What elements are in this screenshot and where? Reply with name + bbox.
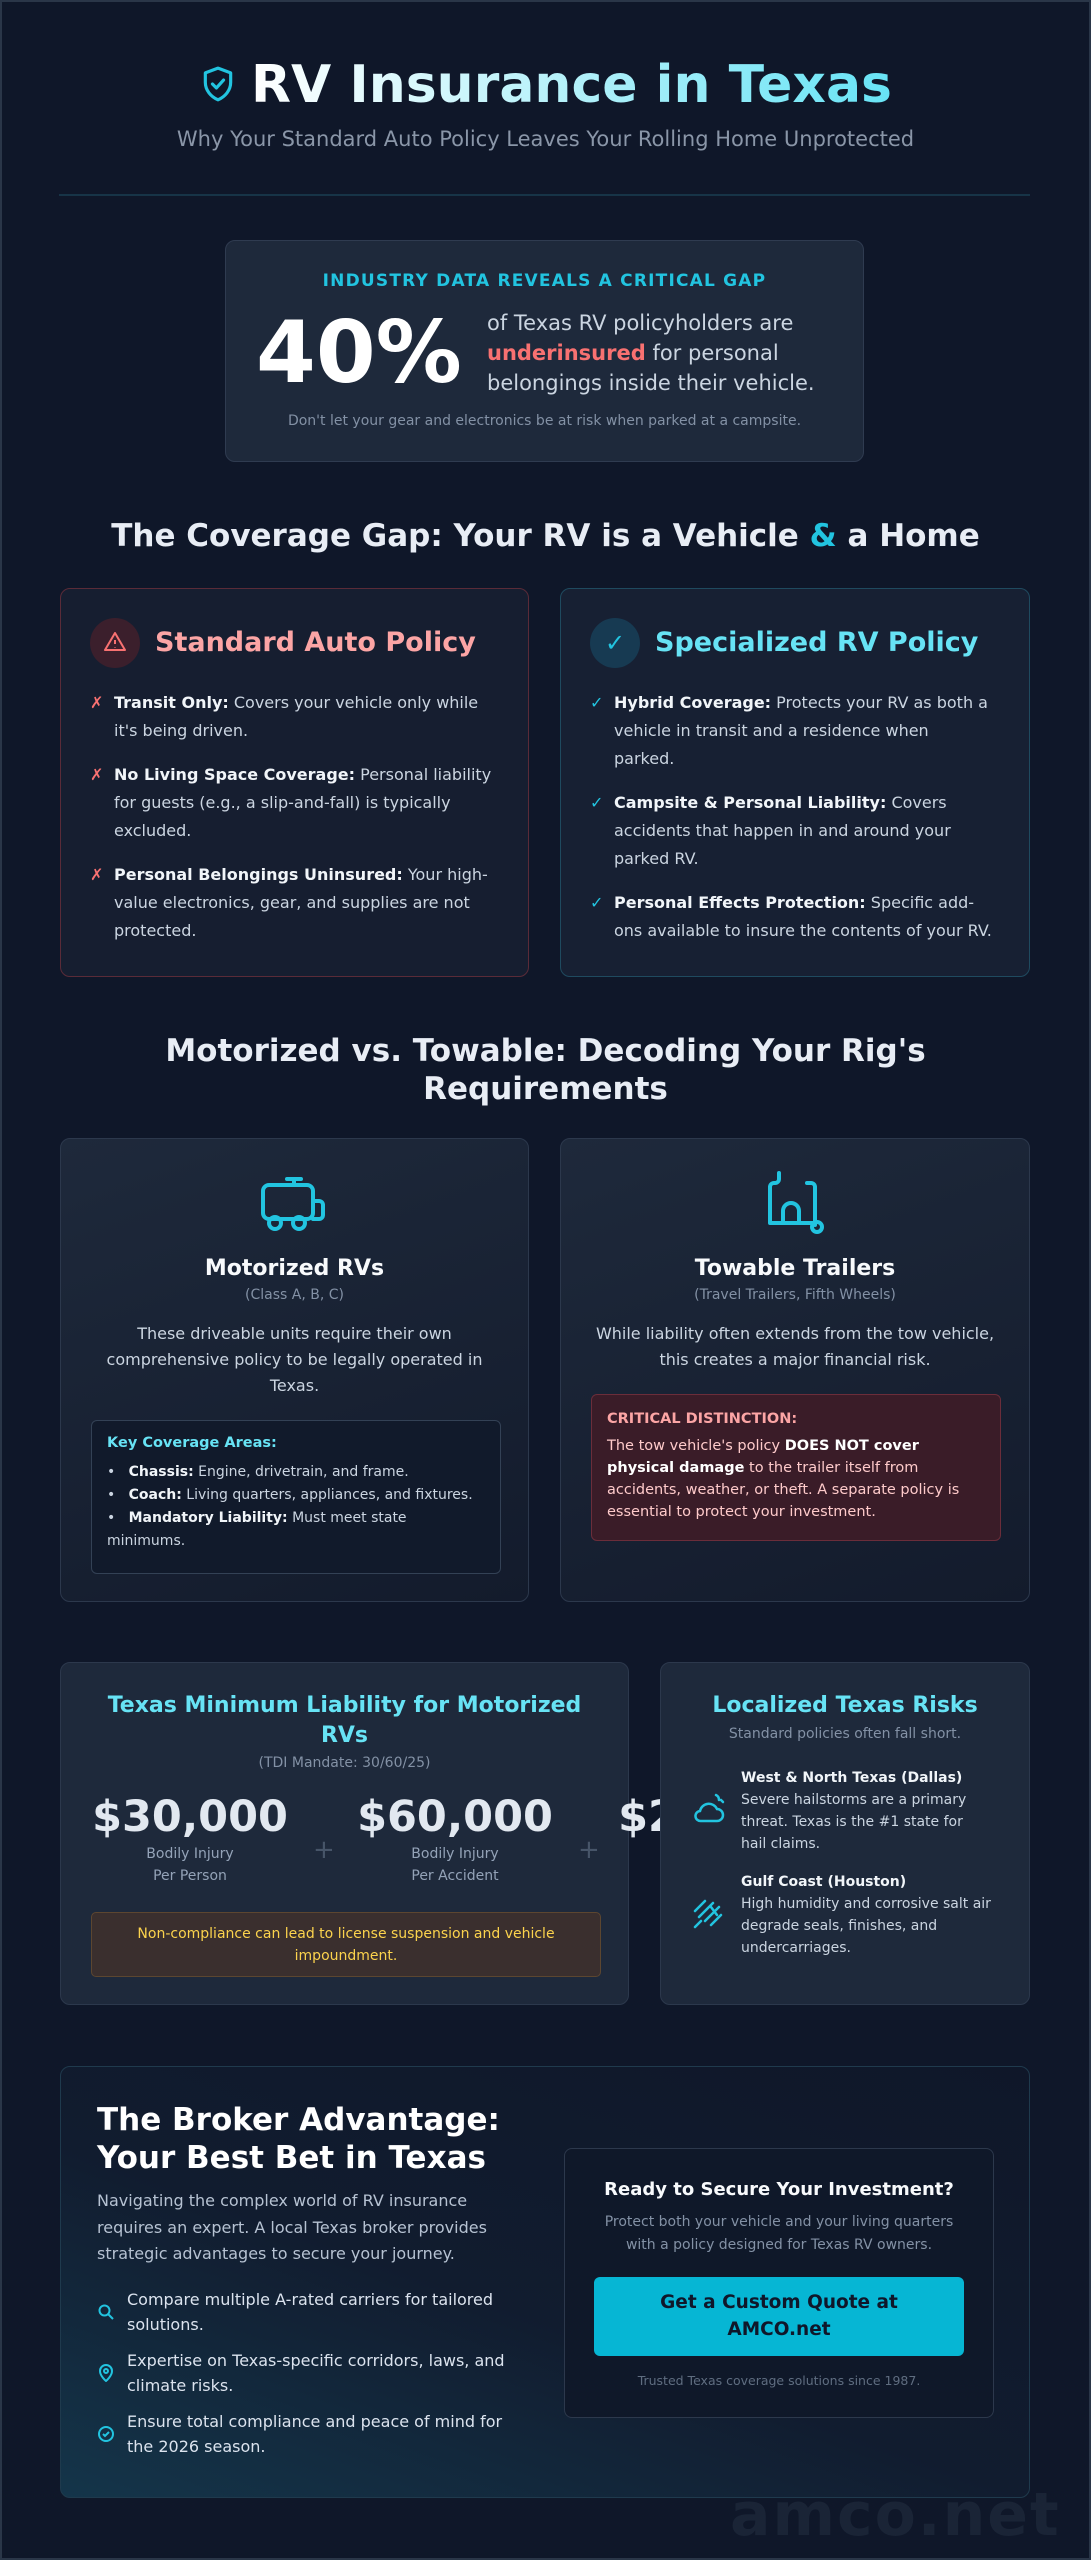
- list: Campsite & Personal Liability: Covers accidents that happen in and around your parked RV.: [614, 793, 951, 868]
- risk: hail: West & North Texas (Dallas): [741, 1770, 962, 1786]
- panel: localized texas risks: [660, 1662, 1030, 2005]
- heading: [96, 2102, 500, 2176]
- stat text: of Texas RV policyholders are underinsured for personal belongings inside their vehicle.: [487, 311, 815, 395]
- icon: trailer: [768, 1171, 824, 1234]
- list: [90, 693, 491, 940]
- title: Localized Texas Risks: [712, 1693, 978, 1718]
- amounts row: +: [578, 1835, 600, 1865]
- button: AMCO.net: [727, 2319, 831, 2340]
- amount 3: Property: [686, 1846, 746, 1862]
- amount 2: Per Accident: [411, 1868, 499, 1884]
- amounts row: +: [313, 1835, 335, 1865]
- amount 3: [618, 1792, 814, 1884]
- critical distinction box: [591, 1394, 1001, 1541]
- title: Texas Minimum Liability for Motorized RVs: [108, 1693, 581, 1748]
- title: Towable Trailers: [695, 1256, 895, 1281]
- heading: Your Best Bet in Texas: [97, 2140, 486, 2176]
- critical distinction box: CRITICAL DISTINCTION:: [607, 1411, 797, 1427]
- amount 2: $60,000: [357, 1792, 553, 1842]
- button: Get a Custom Quote at: [660, 2292, 898, 2313]
- heading: coverage gap: The Coverage Gap: Your RV is a Vehicle & a Home: [111, 518, 980, 554]
- panel: texas minimum liability: [60, 1662, 629, 2005]
- amount 1: [92, 1792, 288, 1884]
- key coverage box: Key Coverage Areas:: [107, 1435, 277, 1451]
- icon: check: [590, 618, 640, 668]
- heading: motorized vs towable: Motorized vs. Towable: Decoding Your Rig's Requirements: [165, 1033, 926, 1107]
- title: Motorized RVs: [205, 1256, 384, 1281]
- stat label: INDUSTRY DATA REVEALS A CRITICAL GAP: [323, 271, 766, 291]
- key coverage box: • Chassis: Engine, drivetrain, and frame.: [107, 1464, 409, 1480]
- list: Hybrid Coverage: Protects your RV as both a vehicle in transit and a residence when parked.: [614, 693, 988, 768]
- key coverage box: • Coach: Living quarters, appliances, and fixtures.: [107, 1487, 473, 1503]
- key coverage box: • Mandatory Liability: Must meet state minimums.: [107, 1510, 407, 1549]
- risk: hail: [694, 1770, 966, 1852]
- benefit: compare: Compare multiple A-rated carriers for tailored solutions.: [127, 2290, 493, 2334]
- risk: gulf coast: Gulf Coast (Houston): [741, 1874, 906, 1890]
- benefits list: [98, 2290, 505, 2456]
- panel: specialized RV policy: ✓: [590, 693, 603, 712]
- benefit: expertise: Expertise on Texas-specific corridors, laws, and climate risks.: [127, 2351, 505, 2395]
- icon: salt wind: [694, 1900, 722, 1928]
- big number: 40%: [256, 303, 462, 403]
- watermark: amco.net: [730, 2480, 1061, 2550]
- icon: motorhome: [261, 1177, 325, 1231]
- list: Personal Belongings Uninsured: Your high-value electronics, gear, and supplies are not protected.: [114, 865, 488, 940]
- risk: gulf coast: [694, 1874, 991, 1956]
- CTA text: Protect both your vehicle and your living quarters with a policy designed for Texas RV owners.: [605, 2214, 953, 2253]
- stat callout: [225, 240, 864, 462]
- warning: Non-compliance can lead to license suspension and vehicle impoundment.: [137, 1926, 555, 1964]
- footnote: Don't let your gear and electronics be at risk when parked at a campsite.: [288, 413, 801, 429]
- trust line: Trusted Texas coverage solutions since 1987.: [638, 2373, 920, 2388]
- panel: standard auto policy: [60, 588, 529, 977]
- panel: standard auto policy: ✗: [90, 865, 103, 884]
- key coverage box: [91, 1420, 501, 1574]
- icon: shield: [204, 66, 232, 102]
- subtitle: (Class A, B, C): [245, 1287, 344, 1303]
- panel: specialized RV policy: [560, 588, 1030, 977]
- title: RV Insurance in Texas: [251, 55, 892, 115]
- amount 2: [357, 1792, 553, 1884]
- subtitle: (Travel Trailers, Fifth Wheels): [694, 1287, 896, 1303]
- CTA box: [564, 2148, 994, 2418]
- amounts row: [92, 1792, 814, 1884]
- panel: specialized RV policy: ✓: [590, 793, 603, 812]
- risk: gulf coast: High humidity and corrosive salt air degrade seals, finishes, and undercarriages.: [741, 1896, 991, 1956]
- subtitle: Why Your Standard Auto Policy Leaves Your Rolling Home Unprotected: [177, 127, 914, 151]
- panel: specialized RV policy: ✓: [590, 893, 603, 912]
- icon: warning: [90, 618, 140, 668]
- panel: standard auto policy: ✗: [90, 765, 103, 784]
- benefit: compliance: Ensure total compliance and peace of mind for the 2026 season.: [127, 2412, 502, 2456]
- heading: Standard Auto Policy: [155, 627, 476, 658]
- list: Personal Effects Protection: Specific add-ons available to insure the contents of your RV.: [614, 893, 992, 940]
- heading: Specialized RV Policy: [655, 627, 978, 658]
- amount 1: $30,000: [92, 1792, 288, 1842]
- amount 2: Bodily Injury: [411, 1846, 499, 1862]
- risk: hail: Severe hailstorms are a primary threat. Texas is the #1 state for hail claims.: [741, 1792, 966, 1852]
- amount 1: Per Person: [153, 1868, 227, 1884]
- list: [590, 693, 992, 940]
- critical distinction box: The tow vehicle's policy DOES NOT cover physical damage to the trailer itself from accidents, weather, or theft. A separate policy is essential to protect your investment.: [607, 1438, 959, 1520]
- button: [594, 2277, 964, 2356]
- warning: [91, 1912, 601, 1977]
- mandate: (TDI Mandate: 30/60/25): [258, 1755, 430, 1771]
- subtitle: Standard policies often fall short.: [729, 1726, 961, 1742]
- amount 1: Bodily Injury: [146, 1846, 234, 1862]
- panel: motorized RVs: [60, 1138, 529, 1602]
- icon: storm cloud: [694, 1794, 724, 1822]
- icon: check: ✓: [605, 629, 625, 657]
- amount 3: Damage: [686, 1868, 746, 1884]
- panel: towable trailers: [560, 1138, 1030, 1602]
- panel: broker advantage: [60, 2066, 1030, 2498]
- CTA heading: Ready to Secure Your Investment?: [604, 2179, 954, 2200]
- list: No Living Space Coverage: Personal liability for guests (e.g., a slip-and-fall) is typically excluded.: [114, 765, 491, 840]
- description: These driveable units require their own comprehensive policy to be legally operated in Texas.: [107, 1324, 482, 1395]
- amount 3: $25,000: [618, 1792, 814, 1842]
- description: While liability often extends from the tow vehicle, this creates a major financial risk.: [596, 1324, 994, 1369]
- heading: The Broker Advantage:: [97, 2102, 500, 2138]
- panel: standard auto policy: ✗: [90, 693, 103, 712]
- paragraph: Navigating the complex world of RV insurance requires an expert. A local Texas broker provides strategic advantages to secure your journey.: [97, 2191, 487, 2263]
- list: Transit Only: Covers your vehicle only while it's being driven.: [114, 693, 478, 740]
